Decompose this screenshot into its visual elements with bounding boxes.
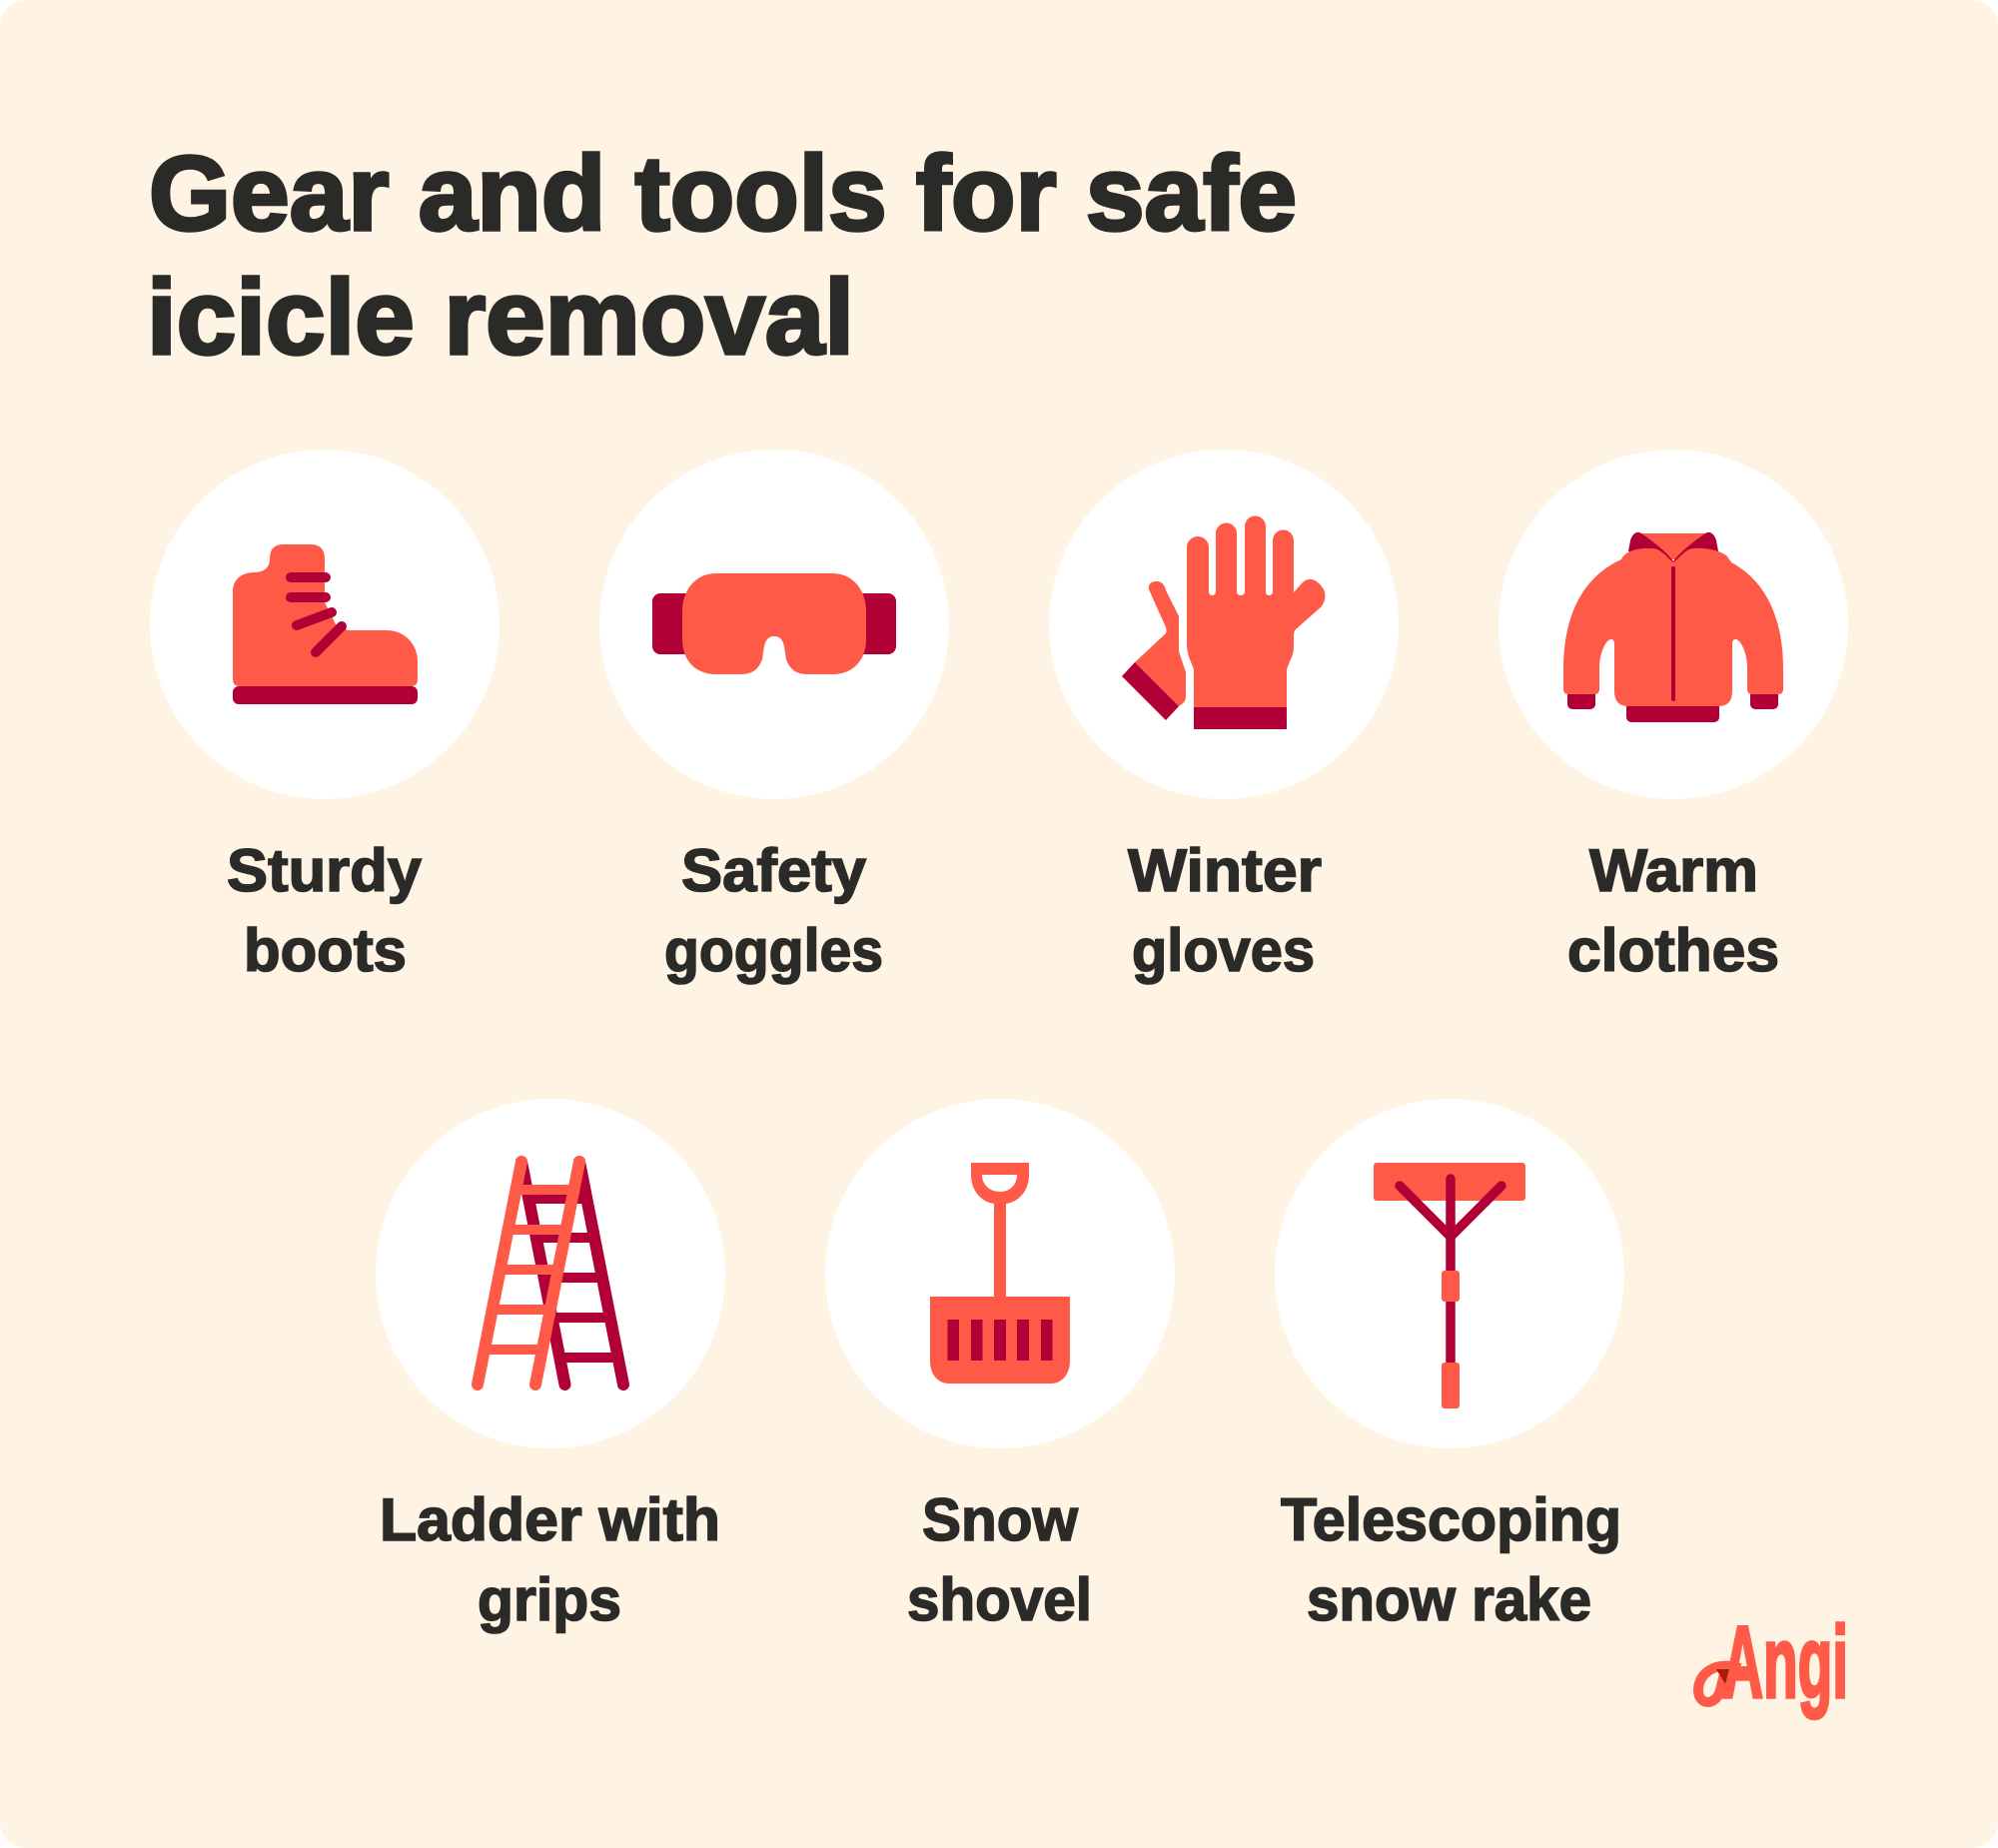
circle: goggles — [599, 450, 949, 799]
title — [147, 135, 1297, 377]
label: sturdy boots — [227, 837, 423, 984]
label: safety goggles: Safety — [681, 837, 867, 904]
label: sturdy boots: Sturdy — [227, 837, 423, 904]
icon: gloves — [1122, 515, 1325, 729]
icon: ladder — [478, 1162, 623, 1385]
label: winter gloves: Winter — [1128, 837, 1322, 904]
label: telescoping snow rake: Telescoping — [1281, 1486, 1621, 1553]
label: warm clothes — [1567, 837, 1779, 984]
icon: goggles — [652, 573, 896, 674]
label: ladder with grips: grips — [478, 1566, 621, 1633]
label: telescoping snow rake — [1281, 1486, 1621, 1633]
label: ladder with grips — [380, 1486, 720, 1633]
icon: snow rake — [1374, 1163, 1525, 1408]
circle: ladder — [376, 1099, 725, 1448]
item: telescoping snow rake — [1275, 1099, 1624, 1633]
label: ladder with grips: Ladder with — [380, 1486, 720, 1553]
label: winter gloves: gloves — [1132, 917, 1315, 984]
item: sturdy boots — [150, 450, 500, 984]
label: safety goggles: goggles — [664, 917, 883, 984]
label: snow shovel — [907, 1486, 1092, 1633]
logo: Angi: Angi — [1722, 1605, 1848, 1719]
item: winter gloves — [1049, 450, 1399, 984]
logo: Angi — [1698, 1605, 1848, 1719]
circle: rake — [1275, 1099, 1624, 1448]
circle: clothes — [1498, 450, 1848, 799]
item: warm clothes — [1498, 450, 1848, 984]
label: safety goggles — [664, 837, 883, 984]
circle: shovel — [825, 1099, 1175, 1448]
label: winter gloves — [1128, 837, 1322, 984]
label: warm clothes: clothes — [1567, 917, 1779, 984]
circle: gloves — [1049, 450, 1399, 799]
icon: boot — [233, 544, 418, 704]
label: telescoping snow rake: snow rake — [1307, 1566, 1591, 1633]
icon: shovel — [930, 1163, 1070, 1384]
title: icicle removal — [147, 259, 854, 377]
label: snow shovel: shovel — [907, 1566, 1092, 1633]
item: snow shovel — [825, 1099, 1175, 1633]
title: Gear and tools for safe — [149, 135, 1297, 253]
label: warm clothes: Warm — [1589, 837, 1758, 904]
label: snow shovel: Snow — [922, 1486, 1078, 1553]
circle: boots — [150, 450, 500, 799]
icon: jacket — [1563, 532, 1783, 722]
item: safety goggles — [599, 450, 949, 984]
label: sturdy boots: boots — [244, 917, 407, 984]
item: ladder with grips — [376, 1099, 725, 1633]
